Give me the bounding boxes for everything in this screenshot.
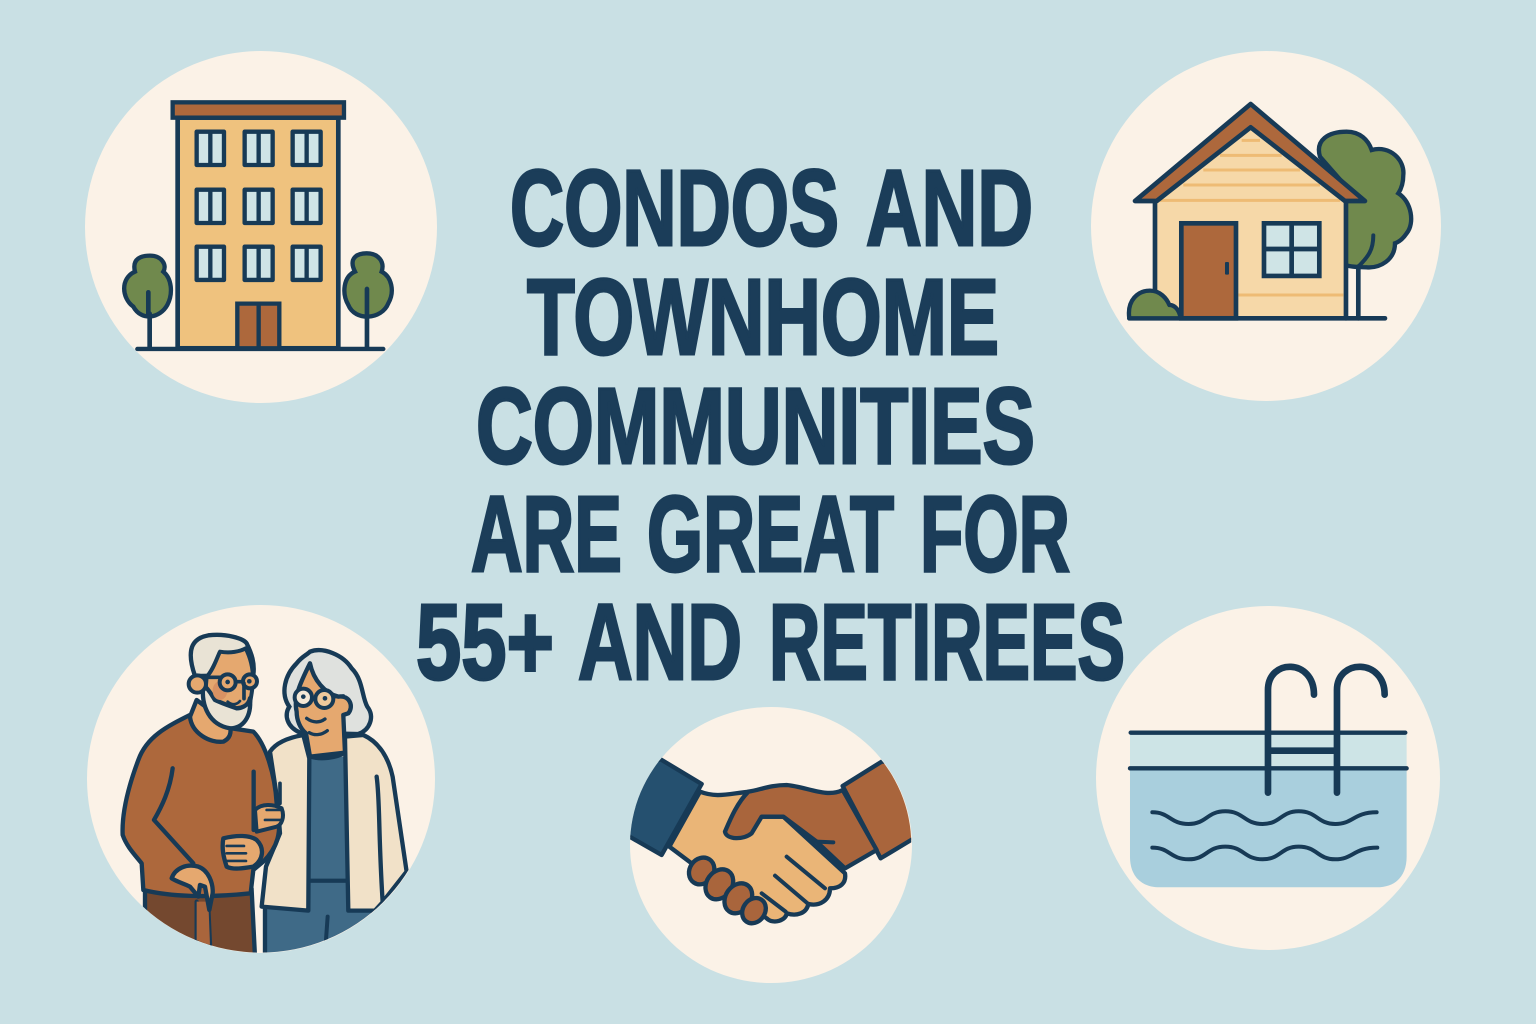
icon: house xyxy=(1129,104,1385,318)
illustration: couple xyxy=(123,635,407,957)
title line 2: TOWNHOME xyxy=(527,256,999,377)
title line 1: AND xyxy=(866,147,1033,268)
icon: bush xyxy=(1129,291,1181,318)
woman xyxy=(262,650,407,957)
title line 3: COMMUNITIES xyxy=(476,365,1035,486)
icon: handshake xyxy=(627,759,917,928)
panel: condo building xyxy=(85,51,437,403)
title line 5 xyxy=(416,581,1125,702)
light hand xyxy=(669,792,845,921)
right cuff xyxy=(843,760,917,858)
left cuff xyxy=(627,759,702,855)
man xyxy=(123,635,283,957)
ladder xyxy=(1268,667,1385,793)
waves xyxy=(1152,811,1377,824)
title line 4: ARE xyxy=(471,473,622,594)
icon: apartment building xyxy=(137,102,383,349)
icon: house tree xyxy=(1319,132,1411,318)
water xyxy=(1130,769,1407,887)
icon: left tree xyxy=(124,256,171,348)
panel: house xyxy=(1091,51,1441,401)
title line 5: 55+ xyxy=(416,581,554,702)
title line 4: FOR xyxy=(920,473,1070,594)
icon: pool xyxy=(1130,667,1407,887)
panel: swimming pool xyxy=(1096,606,1440,950)
panel: senior couple xyxy=(87,605,435,957)
pool deck band xyxy=(1130,733,1407,769)
panel: handshake xyxy=(627,707,917,983)
icon: right tree xyxy=(344,253,392,348)
dark hand xyxy=(725,785,877,868)
title line 5: AND xyxy=(578,581,742,702)
title line 4: GREAT xyxy=(647,473,894,594)
title line 4 xyxy=(471,473,1070,594)
title xyxy=(416,147,1125,702)
title line 5: RETIREES xyxy=(769,581,1125,702)
title line 1: CONDOS xyxy=(510,147,839,268)
fingers xyxy=(684,853,771,928)
